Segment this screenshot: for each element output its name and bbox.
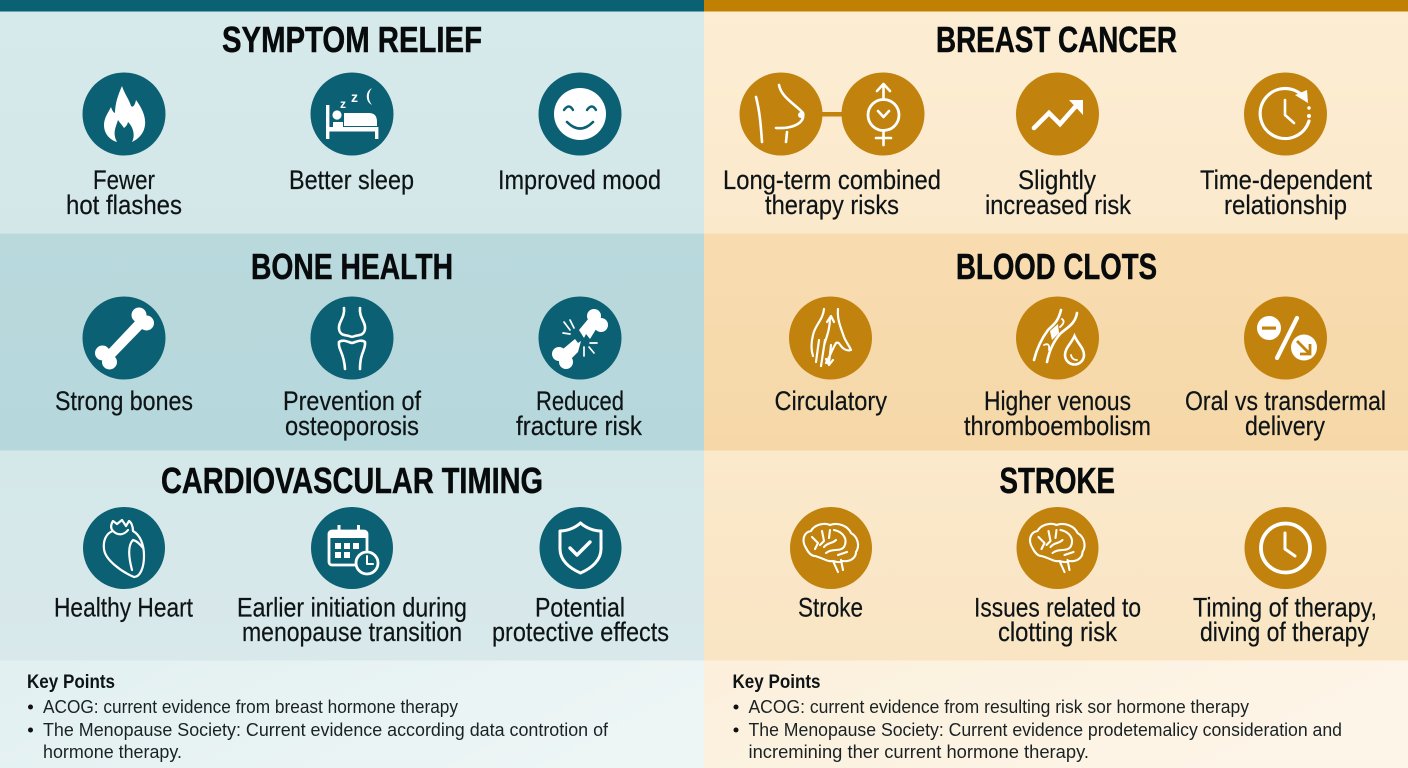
item: time-dependent relationship: Time-dependent: [1200, 165, 1373, 195]
icon: vein and blood drop: [1034, 310, 1084, 364]
item: timing of therapy: Timing of therapy,: [1193, 592, 1377, 622]
item: earlier initiation: menopause transition: [242, 617, 462, 647]
icon: rising arrow: [1034, 100, 1083, 128]
heading: breast cancer: BREAST CANCER: [936, 19, 1177, 60]
item: stroke: [790, 507, 872, 622]
item: strong bones: Strong bones: [55, 386, 193, 416]
panel: key points right: [704, 660, 1408, 768]
icon: bone: [95, 308, 154, 370]
icon: breast outline: [756, 85, 804, 142]
item: potential protective effects: [492, 507, 669, 647]
item: long-term combined therapy risks: [723, 72, 941, 220]
icon: shield with check: [560, 523, 601, 573]
panel: stroke: [704, 450, 1408, 660]
heading: key points: Key Points: [732, 671, 821, 693]
bullet: ACOG: ACOG: current evidence from resulting risk sor hormone therapy: [748, 696, 1250, 717]
item: better sleep: [289, 72, 414, 195]
item: earlier initiation: [237, 507, 467, 647]
item: time-dependent relationship: [1200, 72, 1373, 220]
icon: clock: [1261, 524, 1310, 572]
item: strong bones: [55, 296, 193, 416]
icon: percent with minus and arrow: [1257, 316, 1317, 360]
icon: calendar with clock: [329, 525, 378, 574]
heading: symptom relief: SYMPTOM RELIEF: [222, 19, 482, 60]
icon: smiley: [554, 88, 606, 140]
icon: anatomical heart: [104, 520, 144, 577]
icon: brain: [804, 524, 858, 572]
item: issues related to clotting risk: clotting risk: [998, 617, 1118, 647]
top bar: benefits: [0, 0, 704, 12]
icon: hormone symbol: [868, 84, 899, 145]
item: improved mood: [498, 72, 661, 195]
item: fewer hot flashes: Fewer: [93, 165, 155, 195]
item: prevention of osteoporosis: Prevention of: [283, 386, 422, 416]
panel: breast cancer: [704, 12, 1408, 234]
item: long-term combined therapy risks: Long-term combined: [723, 165, 941, 195]
item: timing of therapy: diving of therapy: [1200, 617, 1370, 647]
icon: bed with moon: z: [340, 97, 346, 111]
panel: cardiovascular timing: [0, 450, 704, 660]
item: circulatory: Circulatory: [774, 386, 888, 416]
item: fewer hot flashes: [66, 72, 182, 220]
icon: brain: [1030, 524, 1085, 572]
item: oral vs transdermal delivery: [1185, 296, 1386, 441]
item: healthy heart: [54, 507, 194, 622]
heading: cardiovascular timing: CARDIOVASCULAR TIMING: [161, 460, 543, 501]
bullet: The Menopause Society: hormone therapy.: [43, 741, 182, 762]
item: healthy heart: Healthy Heart: [54, 592, 194, 622]
item: circulatory: [774, 296, 888, 416]
heading: bone health: BONE HEALTH: [251, 246, 453, 287]
bullet: The Menopause Society: incremining ther current hormone therapy.: [748, 741, 1089, 762]
bullet: The Menopause Society: [734, 719, 1342, 762]
panel: bone health: [0, 234, 704, 450]
item: better sleep: Better sleep: [289, 165, 414, 195]
item: fewer hot flashes: hot flashes: [66, 190, 182, 220]
item: potential protective effects: protective effects: [492, 617, 669, 647]
item: oral vs transdermal delivery: delivery: [1245, 411, 1326, 441]
item: higher venous thromboembolism: thromboembolism: [964, 411, 1151, 441]
item: prevention of osteoporosis: osteoporosis: [285, 411, 419, 441]
item: issues related to clotting risk: [974, 507, 1141, 647]
item: long-term combined therapy risks: therapy risks: [765, 190, 899, 220]
heading: key points: Key Points: [27, 671, 115, 693]
item: higher venous thromboembolism: [964, 296, 1151, 441]
icon: bed with moon: [326, 88, 378, 139]
item: stroke: Stroke: [798, 592, 863, 622]
item: reduced fracture risk: [516, 296, 643, 441]
icon: flame: [104, 86, 145, 142]
bullet: ACOG: ACOG: current evidence from breast hormone therapy: [43, 696, 459, 717]
icon: knee joint: [339, 308, 365, 369]
item: time-dependent relationship: relationship: [1224, 190, 1347, 220]
item: prevention of osteoporosis: [283, 296, 422, 441]
icon: hand with circulation arrows: [812, 309, 851, 366]
panel: key points left: [0, 660, 704, 768]
bullet: The Menopause Society: The Menopause Society: Current evidence prodetemalicy consideration and: [748, 719, 1342, 740]
panel: symptom relief: [0, 12, 704, 234]
item: potential protective effects: Potential: [535, 592, 625, 622]
item: higher venous thromboembolism: Higher venous: [984, 386, 1131, 416]
panel: blood clots: [704, 234, 1408, 450]
icon: bed with moon: z: [351, 89, 358, 105]
item: reduced fracture risk: Reduced: [536, 386, 624, 416]
item: slightly increased risk: increased risk: [985, 190, 1132, 220]
top bar: risks: [704, 0, 1408, 12]
bullet: The Menopause Society: [28, 719, 609, 762]
item: timing of therapy: [1193, 507, 1377, 647]
item: earlier initiation: Earlier initiation during: [237, 592, 467, 622]
item: slightly increased risk: Slightly: [1018, 165, 1097, 195]
icon: clock with arrow: [1260, 89, 1311, 139]
heading: stroke: STROKE: [1000, 460, 1115, 501]
item: issues related to clotting risk: Issues related to: [974, 592, 1141, 622]
heading: blood clots: BLOOD CLOTS: [956, 246, 1157, 287]
icon: fractured bone: [552, 309, 608, 369]
item: slightly increased risk: [985, 72, 1132, 220]
bullet: The Menopause Society: The Menopause Society: Current evidence according data controtion of: [43, 719, 609, 740]
item: reduced fracture risk: fracture risk: [516, 411, 643, 441]
item: improved mood: Improved mood: [498, 165, 661, 195]
